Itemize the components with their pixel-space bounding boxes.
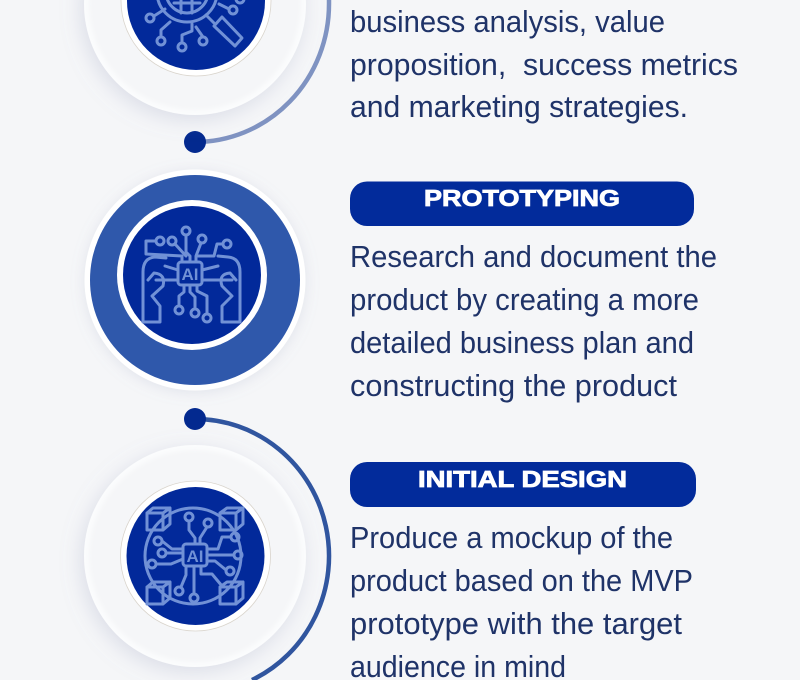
text block: prototyping description — [350, 239, 717, 403]
circle badge: business analysis — [84, 0, 306, 115]
icon text: AI chip label: AI — [186, 547, 204, 566]
icon: magnifier with circuit nodes — [146, 0, 244, 51]
text block: step one description — [350, 4, 738, 124]
heading pill: prototyping — [350, 182, 694, 226]
heading pill: initial design — [350, 462, 696, 507]
icon: hands and AI chip — [143, 227, 240, 322]
text block: prototyping description: constructing the product — [350, 368, 677, 403]
text block: step one description: and marketing strategies. — [350, 89, 688, 124]
circle badge: prototyping — [84, 170, 306, 390]
text block: prototyping description: product by creating a more — [350, 282, 699, 317]
text block: step one description: business analysis, value — [350, 4, 665, 39]
text block: prototyping description: detailed business plan and — [350, 325, 694, 360]
heading pill: initial design: INITIAL DESIGN — [418, 466, 627, 492]
text block: prototyping description: Research and document the — [350, 239, 717, 274]
connector arc: second to third step — [184, 408, 329, 680]
text block: initial design description: prototype with the target — [350, 606, 682, 641]
circle badge: initial design — [84, 445, 306, 667]
text block: step one description: proposition, success metrics — [350, 47, 738, 82]
icon text: AI chip label: AI — [182, 265, 198, 284]
icon: AI chip with cubes — [145, 508, 243, 604]
text block: initial design description: product based on the MVP — [350, 563, 693, 598]
connector arc: first to second step — [184, 0, 329, 153]
text block: initial design description — [350, 520, 693, 680]
heading pill: prototyping: PROTOTYPING — [424, 185, 620, 211]
text block: initial design description: Produce a mockup of the — [350, 520, 673, 555]
